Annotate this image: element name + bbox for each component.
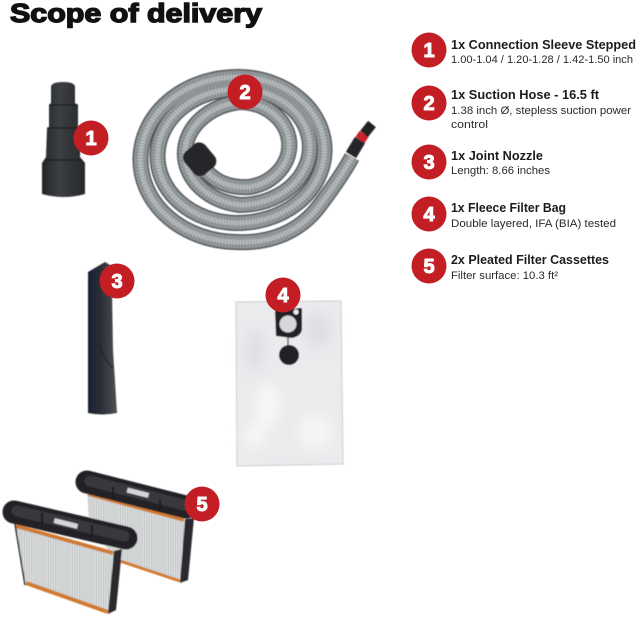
badge 4 on bag <box>266 278 300 312</box>
legend entry 5: Filter surface: 10.3 ft² <box>451 270 558 282</box>
legend entry 1: 1.00-1.04 / 1.20-1.28 / 1.42-1.50 inch <box>451 54 633 66</box>
badge 3 on nozzle <box>100 264 134 298</box>
item 3: joint nozzle <box>88 262 117 414</box>
legend entry 2 <box>412 86 631 131</box>
legend entry 3: Length: 8.66 inches <box>451 165 551 177</box>
bag cap <box>279 345 299 365</box>
item 4: fleece filter bag <box>236 301 343 466</box>
legend entry 1: 1 <box>423 40 435 62</box>
legend entry 2: 1.38 inch Ø, stepless suction power <box>451 105 631 117</box>
bag texture <box>243 312 333 450</box>
badge 5 on cassette: 5 <box>196 494 208 516</box>
front cassette <box>14 511 126 614</box>
hose coils <box>140 77 352 242</box>
legend entry 4: 1x Fleece Filter Bag <box>451 201 566 215</box>
item 2: suction hose <box>140 77 372 242</box>
back cassette <box>87 481 194 583</box>
legend entry 3 <box>412 144 551 180</box>
legend entry 4: Double layered, IFA (BIA) tested <box>451 218 616 230</box>
item 1: connection sleeve <box>42 82 85 197</box>
item 5: pleated filter cassettes <box>14 481 194 614</box>
legend entry 2: control <box>451 119 488 131</box>
legend entry 3: 3 <box>423 152 435 174</box>
badge 2 on hose: 2 <box>239 82 251 104</box>
legend entry 4: 4 <box>423 204 435 226</box>
legend entry 3: 1x Joint Nozzle <box>451 149 543 163</box>
legend entry 5: 5 <box>423 256 435 278</box>
legend entry 2: 2 <box>423 93 435 115</box>
legend entry 1 <box>412 32 636 68</box>
badge 1 on sleeve <box>74 120 108 156</box>
bag collar <box>275 308 302 338</box>
legend entry 4 <box>412 196 616 232</box>
legend entry 5: 2x Pleated Filter Cassettes <box>451 253 609 267</box>
badge 1 on sleeve: 1 <box>85 128 97 150</box>
hose nozzle <box>351 124 372 155</box>
legend entry 2: 1x Suction Hose - 16.5 ft <box>451 88 600 102</box>
badge 5 on cassette <box>184 486 220 522</box>
legend entry 1: 1x Connection Sleeve Stepped <box>451 38 636 52</box>
badge 3 on nozzle: 3 <box>111 271 123 293</box>
legend entry 5 <box>412 248 609 284</box>
badge 4 on bag: 4 <box>277 285 289 307</box>
badge 2 on hose <box>228 74 262 110</box>
hose connector <box>180 139 220 179</box>
